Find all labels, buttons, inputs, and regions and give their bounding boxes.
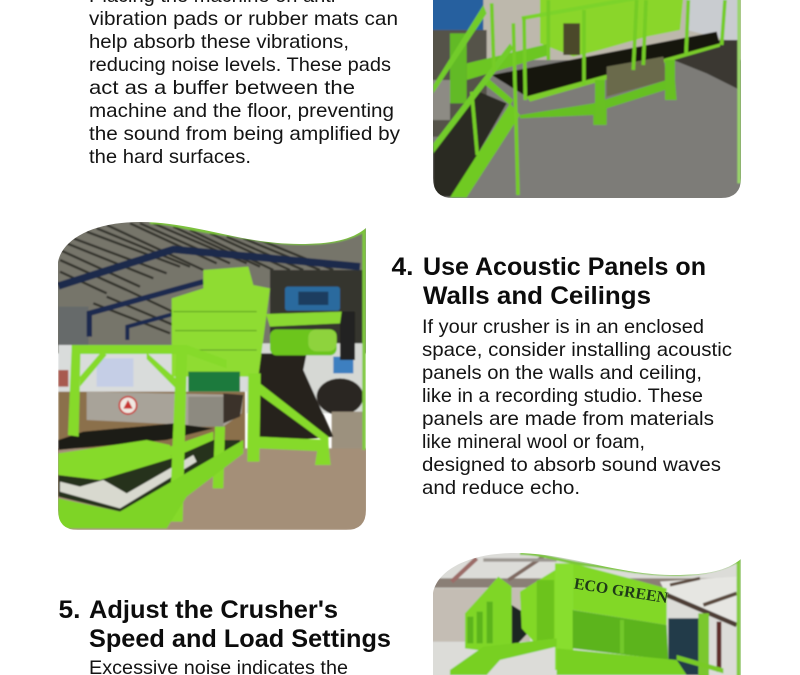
step 4 body text: designed to absorb sound waves [422, 454, 721, 476]
step 4 body text: like mineral wool or foam, [422, 431, 645, 453]
photo: Eco Green crusher [430, 552, 743, 675]
section 3 body text: the sound from being amplified by [89, 123, 400, 145]
section 3 body text: machine and the floor, preventing [89, 100, 394, 122]
step 5 number: 5. [58, 596, 80, 624]
step 5 heading [89, 596, 391, 653]
step 4 body text [422, 316, 732, 499]
section 3 body text: vibration pads or rubber mats can [89, 8, 398, 30]
step 4 body text: panels on the walls and ceiling, [422, 362, 702, 384]
step 4 number: 4. [392, 253, 414, 281]
photo: crusher platform with stairs [430, 0, 743, 203]
section 3 body text: help absorb these vibrations, [89, 31, 349, 53]
photo: green crusher under shed roof [57, 220, 367, 530]
section 3 body text: the hard surfaces. [89, 146, 251, 168]
step 4 body text: space, consider installing acoustic [422, 339, 732, 361]
section 3 body text: reducing noise levels. These pads [89, 54, 391, 76]
step 4 body text: like in a recording studio. These [422, 385, 703, 407]
step 4 heading: Walls and Ceilings [423, 282, 651, 310]
step 4 body text: panels are made from materials [422, 408, 714, 430]
step 4 heading: Use Acoustic Panels on [423, 253, 706, 281]
step 4 body text: If your crusher is in an enclosed [422, 316, 704, 338]
step 5 heading: Speed and Load Settings [89, 625, 391, 653]
photo: Eco Green crusher: ECO GREEN [573, 575, 670, 607]
step 5 heading: Adjust the Crusher's [89, 596, 338, 624]
step 4 body text: and reduce echo. [422, 477, 580, 499]
section 3 body text [89, 0, 400, 168]
section 3 body text: act as a buffer between the [89, 77, 355, 99]
step 4 heading [423, 253, 706, 310]
